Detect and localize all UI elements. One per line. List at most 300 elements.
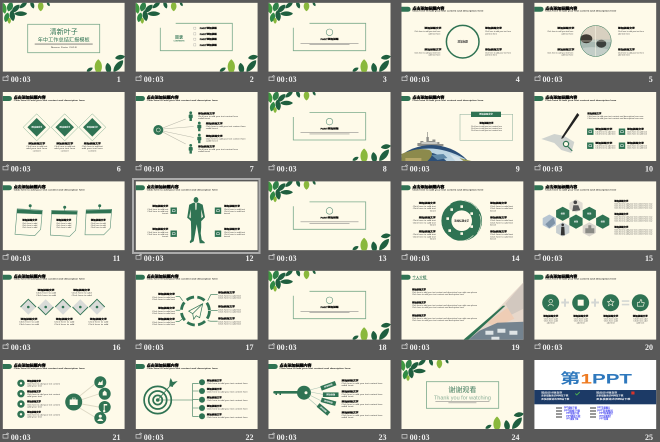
lower captions: Click here to add bbox=[88, 321, 108, 324]
diamond captions: add your text here bbox=[26, 147, 47, 150]
band text: 更多模板请访问网站下载 bbox=[541, 393, 568, 397]
captions: text bbox=[224, 212, 231, 215]
text blocks: 添加标题文字 bbox=[412, 314, 426, 318]
text column: Click here to add your text content here now bbox=[614, 233, 653, 236]
check mark bbox=[575, 392, 580, 395]
slide timings: 00 : 03 bbox=[11, 75, 31, 84]
circle bbox=[446, 25, 479, 58]
slide numbers: 20 bbox=[645, 343, 653, 352]
header: Click here to add your text content and description here bbox=[545, 278, 618, 281]
section heading: PART添加标题 bbox=[320, 216, 340, 220]
slide numbers: 13 bbox=[378, 254, 386, 263]
captions: text bbox=[162, 235, 169, 238]
header bbox=[534, 95, 618, 102]
frame bbox=[160, 23, 232, 51]
text blocks: Click here to add your text content and description here bbox=[412, 293, 464, 296]
captions: Click here to add text bbox=[147, 231, 169, 234]
slide timings: 00 : 03 bbox=[11, 433, 31, 442]
transition icons bbox=[3, 76, 541, 438]
lower captions: 添加标题文字 bbox=[56, 317, 73, 321]
icon captions: 添加标题文字 bbox=[627, 127, 644, 131]
tag labels: 添加标题 bbox=[326, 392, 335, 396]
icon captions bbox=[595, 127, 648, 150]
right captions: Click here to add text bbox=[218, 308, 242, 311]
text blocks: Click here to add your text here bbox=[618, 51, 644, 54]
header: 点击添加标题内容 bbox=[545, 95, 578, 100]
header bbox=[402, 6, 484, 12]
intro text: Click here to add your text content and description here now bbox=[587, 117, 644, 120]
slide numbers bbox=[112, 75, 653, 442]
captions bbox=[543, 314, 648, 325]
contents list: PART添加标题 bbox=[200, 43, 218, 47]
tag labels: 添加标题 bbox=[319, 405, 328, 413]
header: Click here to add your text content and description here bbox=[412, 99, 485, 102]
text blocks: 添加标题文字 bbox=[424, 47, 441, 51]
header bbox=[136, 363, 219, 370]
bracket connector bbox=[158, 383, 199, 417]
blue links: PPT模板下载 bbox=[564, 408, 581, 412]
slide numbers: 8 bbox=[383, 164, 387, 174]
text column: Click here to add your text content here now bbox=[614, 204, 653, 207]
header: 点击添加标题内容 bbox=[280, 363, 312, 368]
text column: Click here to add your text content here now bbox=[614, 206, 653, 209]
slide 11: sticky notes bbox=[3, 181, 125, 250]
text blocks: add text here bbox=[428, 54, 440, 57]
text blocks: Click here to add your text content and description here right now please bbox=[412, 291, 477, 294]
captions: 添加标题文字 bbox=[573, 314, 588, 318]
slide numbers: 17 bbox=[246, 343, 254, 352]
text blocks: add text here bbox=[561, 54, 573, 57]
text blocks: Click here to add your text here bbox=[547, 30, 573, 33]
slide numbers: 24 bbox=[512, 433, 520, 442]
diamond captions: 添加标题文字 bbox=[84, 142, 101, 146]
link labels bbox=[556, 407, 596, 418]
text blocks: 添加标题文字 bbox=[485, 26, 502, 30]
icon glyphs bbox=[172, 210, 219, 235]
captions: Click here to add text bbox=[147, 210, 169, 213]
slide numbers: 5 bbox=[649, 75, 653, 84]
captions: text bbox=[490, 209, 497, 212]
people captions: 添加标题文字 bbox=[206, 134, 223, 138]
frame text bbox=[471, 121, 502, 132]
tag labels: 添加标题 bbox=[324, 398, 333, 405]
diamond captions: add your text here bbox=[82, 147, 103, 150]
slide timings: 00 : 03 bbox=[11, 254, 31, 263]
header bbox=[3, 273, 86, 281]
captions: Click here to add text bbox=[490, 205, 514, 208]
list captions: Click here to add your text content here bbox=[207, 399, 248, 402]
paper bbox=[541, 134, 574, 153]
text column: Click here to add your text content here now bbox=[614, 231, 653, 234]
presenter line: Name Date 2018 bbox=[51, 46, 77, 49]
header: 点击添加标题内容 bbox=[14, 363, 46, 368]
connectors bbox=[176, 295, 218, 322]
people captions: Click here to add your text content here bbox=[198, 148, 238, 151]
slide numbers: 10 bbox=[645, 164, 653, 174]
text blocks: Click here to add your text here bbox=[414, 30, 440, 33]
rule bbox=[34, 44, 93, 45]
captions: 添加标题文字 bbox=[342, 410, 358, 414]
band text: 更多模板请访问网站下载 bbox=[596, 393, 623, 397]
frame text: 添加标题文字 bbox=[479, 121, 493, 125]
captions: Click here to add text bbox=[413, 235, 436, 238]
captions: 添加标题文字 bbox=[152, 204, 168, 208]
text blocks bbox=[547, 26, 644, 57]
header: Click here to add your text content and description here bbox=[412, 188, 485, 191]
icon captions: Click here to add text bbox=[627, 130, 648, 134]
businessman silhouette bbox=[187, 197, 205, 243]
text column: 添加标题文字 bbox=[614, 225, 628, 229]
text blocks: add text here bbox=[485, 32, 497, 35]
right captions: Click here to add text bbox=[218, 323, 242, 326]
header: Click here to add your text content and description here bbox=[147, 278, 219, 281]
captions: text bbox=[224, 235, 231, 238]
blue links: PPT背景图片 bbox=[599, 411, 614, 415]
captions: Click here add bbox=[574, 318, 588, 321]
diamond captions: 添加标题文字 bbox=[28, 142, 45, 146]
left captions: add your text bbox=[27, 416, 43, 419]
slide numbers: 7 bbox=[250, 164, 254, 174]
list captions: Click here to add your text content here bbox=[207, 390, 248, 394]
left captions: Click here to add your text content bbox=[27, 383, 61, 386]
text column: 添加标题文字 bbox=[614, 199, 628, 203]
frame bbox=[293, 113, 366, 140]
slide numbers: 16 bbox=[112, 343, 120, 352]
icon captions: Click here to add text bbox=[627, 144, 648, 148]
text blocks: Click here to add your text content and description here right now please bbox=[412, 304, 477, 307]
captions: 添加标题文字 bbox=[490, 215, 507, 219]
header: Click here to add your text content and description here bbox=[545, 99, 618, 102]
text blocks: 添加标题文字 bbox=[424, 26, 441, 30]
people captions: Click here to add your text content here bbox=[198, 115, 238, 118]
text blocks: 添加标题文字 bbox=[557, 26, 574, 30]
circle label: 添加标题 bbox=[458, 40, 468, 44]
slide 4: circle bbox=[401, 3, 523, 72]
left captions: 添加标题文字 bbox=[158, 292, 175, 296]
note 3 bbox=[85, 204, 112, 235]
right captions: Click here to add text bbox=[218, 294, 242, 297]
captions: Click here add bbox=[633, 320, 647, 323]
header bbox=[2, 95, 85, 102]
lower captions: Click here to add bbox=[19, 323, 39, 326]
icon captions: Click here to add text bbox=[595, 146, 616, 150]
text column bbox=[614, 199, 653, 236]
text blocks: 添加标题文字 bbox=[485, 47, 502, 51]
people captions: 添加标题文字 bbox=[198, 111, 215, 115]
captions bbox=[147, 204, 246, 238]
slide timings: 00 : 03 bbox=[542, 75, 562, 84]
slide 20: equation bbox=[534, 271, 656, 340]
header bbox=[136, 95, 218, 102]
intro text: 添加标题文字 bbox=[587, 112, 601, 116]
text blocks: Click here to add your text here bbox=[618, 30, 644, 33]
captions: add text bbox=[636, 322, 645, 325]
lower captions: Click here to add bbox=[54, 321, 74, 324]
left captions bbox=[152, 292, 176, 326]
frame banner: 添加标题文字 bbox=[479, 112, 493, 116]
slide numbers: 14 bbox=[512, 254, 520, 263]
slide 5: photo circle bbox=[534, 3, 656, 72]
slide 9: planet bbox=[381, 92, 523, 245]
contents list: PART添加标题 bbox=[200, 37, 218, 41]
slide timings: 00 : 03 bbox=[277, 433, 296, 442]
right captions: 添加标题文字 bbox=[218, 291, 235, 295]
captions: Click here to add your text content here bbox=[342, 403, 383, 406]
slide numbers: 3 bbox=[383, 75, 387, 84]
tie bbox=[195, 203, 197, 210]
left captions: Click here to add your text content bbox=[27, 414, 61, 417]
contents sub heading: CONTENTS bbox=[173, 40, 185, 42]
diamond icons bbox=[27, 306, 98, 308]
slide 8: section divider bbox=[266, 90, 391, 164]
header: Click here to add your text content and description here bbox=[412, 10, 485, 13]
captions: text bbox=[162, 212, 169, 215]
operators bbox=[561, 299, 629, 307]
slide timings: 00 : 03 bbox=[542, 343, 562, 352]
slide timings: 00 : 03 bbox=[410, 164, 429, 174]
text blocks: 添加标题文字 bbox=[412, 288, 426, 292]
ring bbox=[441, 200, 481, 241]
left captions: Click here to add your text content bbox=[27, 403, 61, 406]
note 3: 添加标题文字 bbox=[91, 218, 106, 222]
note 2: Click here to add bbox=[56, 226, 71, 229]
header: 点击添加标题内容 bbox=[545, 5, 578, 10]
captions: add text bbox=[577, 322, 585, 325]
right captions bbox=[218, 291, 242, 326]
header bbox=[401, 184, 485, 191]
note 1: Click here to add bbox=[22, 222, 37, 225]
people captions: add text bbox=[198, 150, 211, 153]
people captions: 添加标题文字 bbox=[206, 122, 223, 126]
key tags bbox=[317, 381, 338, 416]
photo triangle bbox=[468, 282, 523, 340]
pen bbox=[561, 113, 579, 139]
right captions: 添加标题文字 bbox=[218, 305, 235, 309]
contents list bbox=[194, 26, 218, 47]
lower captions: Click here to add bbox=[88, 323, 108, 326]
selected slide highlight bbox=[133, 179, 260, 253]
upper captions: Click here to add bbox=[36, 294, 56, 297]
text frame bbox=[460, 114, 513, 140]
header: Click here to add your text content and description here bbox=[14, 278, 86, 281]
center circle with briefcase bbox=[65, 394, 82, 410]
icon captions: 添加标题文字 bbox=[595, 127, 612, 131]
photo hexagons bbox=[543, 199, 596, 236]
slide timings: 00 : 03 bbox=[144, 343, 164, 352]
frame text: Click here to add your text content here bbox=[471, 129, 502, 132]
left captions: Click here to add your text content bbox=[27, 393, 61, 396]
left captions: Click here to add text bbox=[152, 312, 176, 315]
heading: 个人介绍 bbox=[412, 274, 427, 279]
text column: Click here to add your text content here now bbox=[614, 229, 653, 232]
connectors bbox=[80, 384, 99, 417]
note 1: 添加标题文字 bbox=[22, 218, 37, 222]
slide numbers: 6 bbox=[117, 164, 121, 174]
band text: 如此设计很喜欢 bbox=[596, 391, 617, 395]
slide numbers: 12 bbox=[246, 254, 254, 263]
left circles bbox=[17, 380, 25, 418]
lower captions: 添加标题文字 bbox=[20, 317, 37, 321]
captions: text bbox=[430, 238, 437, 241]
captions: Click here add bbox=[544, 318, 558, 321]
slide timings: 00 : 03 bbox=[410, 254, 429, 263]
section badge bbox=[326, 29, 333, 36]
captions: Click here to add text bbox=[413, 207, 436, 210]
captions: add text bbox=[342, 416, 355, 419]
captions: 添加标题文字 bbox=[419, 201, 436, 205]
header: 点击添加标题内容 bbox=[14, 184, 46, 189]
text blocks: Click here to add your text content and description here bbox=[412, 306, 464, 309]
right captions: 添加标题文字 bbox=[218, 317, 235, 321]
list captions: 添加标题文字 bbox=[207, 412, 222, 416]
hexagon labels: 标题 bbox=[601, 220, 605, 224]
captions: add text bbox=[342, 384, 355, 387]
slide timings: 00 : 03 bbox=[144, 164, 164, 174]
header: Click here to add your text content and description here bbox=[545, 188, 618, 191]
text column: Click here to add your text content here now bbox=[614, 202, 653, 205]
left captions: 添加标题文字 bbox=[158, 306, 175, 310]
frame banner bbox=[471, 112, 501, 117]
captions: Click here add bbox=[604, 320, 618, 323]
arrow bbox=[158, 378, 178, 400]
icon squares bbox=[170, 208, 221, 237]
blue links: PPT模板下载 bbox=[566, 416, 579, 420]
slide timings: 00 : 03 bbox=[144, 75, 164, 84]
slide numbers: 18 bbox=[378, 343, 386, 352]
people captions: Click here to add your text content here bbox=[206, 138, 246, 141]
people captions: add text bbox=[198, 117, 211, 120]
left captions: add your text bbox=[27, 395, 43, 398]
list captions: 添加标题文字 bbox=[207, 404, 222, 408]
captions: add text bbox=[547, 322, 555, 325]
slide 23: key bbox=[268, 360, 390, 429]
slide timings: 00 : 03 bbox=[277, 164, 296, 174]
text blocks: add text here bbox=[485, 54, 497, 57]
captions: add text bbox=[342, 395, 355, 398]
header: Click here to add your text content and description here bbox=[14, 188, 86, 191]
band text: 更多模板请访问网站下载 bbox=[596, 397, 630, 401]
left captions: Click here to add text bbox=[152, 298, 176, 301]
band text: 如此设计很喜欢 bbox=[541, 391, 562, 395]
frame bbox=[293, 23, 366, 51]
pill bbox=[401, 275, 411, 280]
frame bbox=[293, 202, 366, 229]
slide 12: businessman bbox=[136, 181, 258, 250]
captions: Click here to add your text content here bbox=[342, 393, 383, 396]
captions: Click here add bbox=[574, 320, 588, 323]
header bbox=[534, 184, 618, 191]
text blocks: 添加标题文字 bbox=[557, 47, 574, 51]
section heading: PART添加标题 bbox=[320, 126, 340, 130]
text blocks: Click here to add your text content and description here bbox=[412, 319, 464, 322]
slide 17: paper plane ring bbox=[136, 271, 258, 340]
slide 13: section divider bbox=[266, 179, 391, 253]
captions bbox=[342, 378, 383, 419]
left captions: add your text bbox=[27, 385, 43, 388]
contents list: PART添加标题 bbox=[200, 32, 218, 36]
note 2: Click here to add bbox=[56, 224, 71, 227]
people captions: 添加标题文字 bbox=[198, 144, 215, 148]
section text bbox=[300, 222, 358, 224]
slide numbers: 22 bbox=[246, 433, 254, 442]
diamond captions: Click here to add text bbox=[26, 145, 48, 148]
section heading: PART添加标题 bbox=[320, 305, 340, 309]
slide timings: 00 : 03 bbox=[277, 254, 296, 263]
captions: 添加标题文字 bbox=[342, 378, 358, 382]
header bbox=[534, 273, 618, 281]
list captions: 添加标题文字 bbox=[207, 378, 222, 382]
slide numbers: 1 bbox=[117, 75, 121, 84]
captions: 添加标题文字 bbox=[490, 229, 507, 233]
slide 10: pen bbox=[534, 92, 656, 161]
section badge bbox=[326, 208, 333, 214]
captions: text bbox=[490, 238, 497, 241]
icon captions: Click here to add text bbox=[595, 130, 616, 134]
section badge bbox=[326, 297, 333, 304]
list captions bbox=[207, 378, 248, 419]
header: 点击添加标题内容 bbox=[412, 95, 445, 100]
text blocks: Click here to add your text here bbox=[414, 51, 440, 54]
list captions: Click here to add your text content here bbox=[207, 416, 248, 419]
subtitle: 年中工作总结汇报模板 bbox=[38, 36, 90, 43]
slide numbers: 11 bbox=[113, 254, 120, 263]
left captions: 添加标题文字 bbox=[27, 400, 41, 404]
right captions: Click here to add text bbox=[218, 320, 242, 323]
slide timings: 00 : 03 bbox=[410, 433, 429, 442]
contents heading: 目录 bbox=[175, 34, 183, 40]
captions: Click here to add text bbox=[490, 219, 514, 222]
text column: Click here to add your text content here now bbox=[614, 219, 653, 222]
list captions: 添加标题文字 bbox=[207, 396, 222, 400]
captions: Click here to add text bbox=[490, 235, 514, 238]
key fan lines bbox=[308, 387, 324, 407]
blue links: PPT模板下载 bbox=[564, 406, 578, 410]
slide timings: 00 : 03 bbox=[277, 343, 296, 352]
people icons bbox=[189, 111, 201, 154]
captions: Click here to add text bbox=[224, 233, 246, 236]
green stripe bbox=[463, 306, 505, 340]
captions: text bbox=[430, 209, 437, 212]
header: Click here to add your text content and description here bbox=[147, 367, 219, 370]
tag labels: 添加标题 bbox=[323, 382, 333, 389]
frame text: Click here to add your text content here bbox=[471, 127, 502, 130]
left captions: 添加标题文字 bbox=[27, 379, 41, 383]
thanks subtitle: Thank you for watching bbox=[434, 396, 491, 402]
dashed ring bbox=[181, 297, 209, 325]
thanks title: 谢谢观看 bbox=[448, 385, 476, 394]
captions: text bbox=[430, 224, 437, 227]
text blocks: add text here bbox=[618, 32, 630, 35]
hub bbox=[153, 119, 194, 144]
hexagon labels bbox=[561, 212, 605, 224]
text blocks: Click here to add your text here bbox=[547, 51, 573, 54]
slide numbers: 25 bbox=[645, 433, 653, 442]
header: 点击添加标题内容 bbox=[412, 5, 445, 10]
left captions bbox=[27, 379, 61, 419]
icon glyphs bbox=[589, 131, 623, 147]
people captions: add text bbox=[206, 140, 219, 143]
header: 点击添加标题内容 bbox=[545, 184, 578, 189]
slide timings: 00 : 03 bbox=[410, 75, 429, 84]
header: Click here to add your text content and description here bbox=[14, 367, 86, 370]
left captions: 添加标题文字 bbox=[27, 389, 41, 393]
text blocks bbox=[414, 26, 511, 57]
captions: text bbox=[490, 224, 497, 227]
note 1: Click here to add bbox=[22, 224, 37, 227]
icon captions: Click here to add text bbox=[627, 146, 648, 150]
diamond 2: 添加标题文字 bbox=[59, 125, 70, 129]
intro text bbox=[587, 112, 644, 120]
